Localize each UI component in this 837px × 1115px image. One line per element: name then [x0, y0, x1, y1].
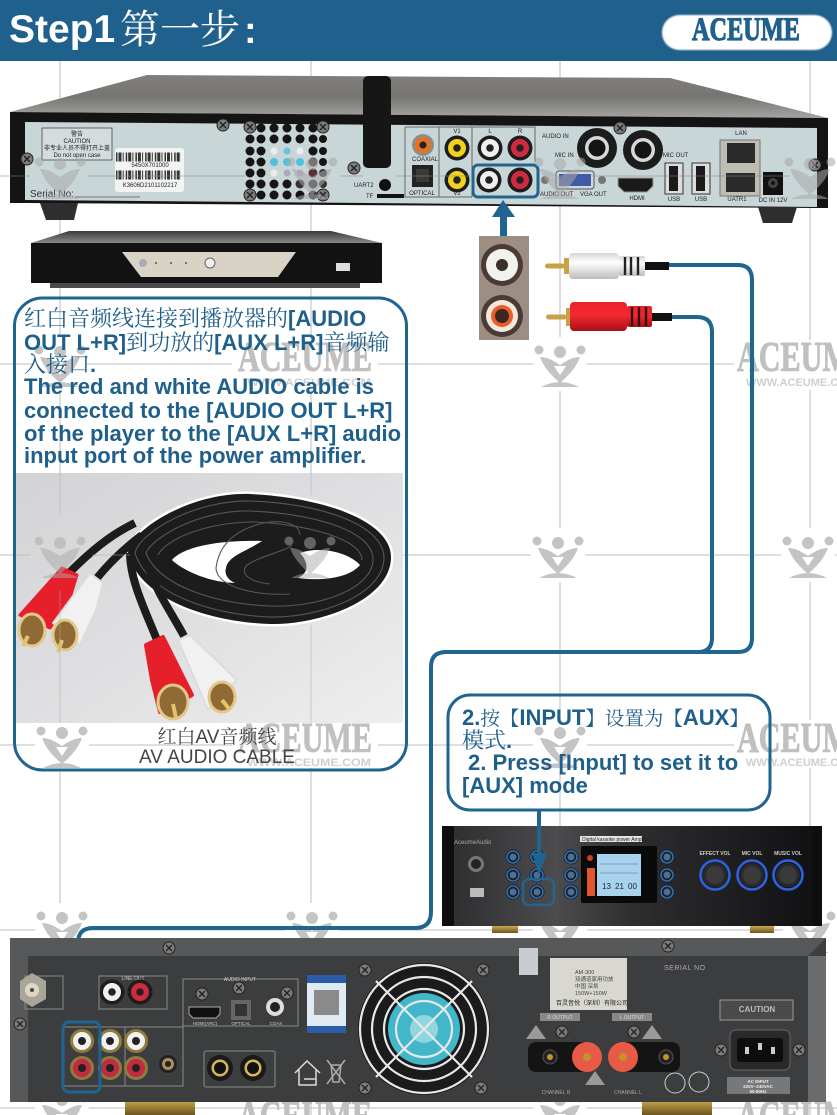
- logo: ACEUME pill: ACEUME: [692, 12, 800, 48]
- title: :: [244, 10, 257, 52]
- volume knobs: MUSIC VOL: [774, 851, 802, 857]
- caution plate: CAUTION: [739, 1005, 775, 1014]
- HDMI port: [618, 178, 653, 192]
- cooling fan: [358, 963, 490, 1095]
- callout: set input to AUX: [448, 695, 770, 810]
- connector labels: LAN: [735, 131, 747, 137]
- AC input label: AC INPUT: [747, 1079, 769, 1084]
- connector labels: COAXIAL: [412, 157, 439, 163]
- cable photo: [16, 473, 403, 723]
- watermark background grid: ACEUME: [238, 335, 372, 381]
- jack close-up photo: [479, 236, 529, 340]
- player front photo: [31, 231, 382, 288]
- amplifier front photo: [442, 826, 822, 933]
- instructions text: input port of the power amplifier.: [24, 443, 366, 468]
- barcode label: 5450X701000: [131, 163, 169, 169]
- photo caption: 红白AV音频线: [158, 726, 276, 748]
- audio input group: AUDIO INPUT: [224, 977, 256, 983]
- jack panel frames: [405, 127, 535, 197]
- DC power socket: [763, 172, 783, 195]
- text panel: connection instructions: [14, 298, 407, 770]
- antenna: [363, 76, 391, 168]
- cable coil: [128, 494, 391, 624]
- connector labels: UATR1: [727, 197, 747, 203]
- connector labels: MIC IN: [555, 153, 574, 159]
- connector labels: DC IN 12V: [759, 198, 787, 204]
- connector labels: V2: [453, 191, 461, 197]
- ventilation holes: [244, 121, 329, 201]
- power knob and USB: [468, 856, 484, 897]
- line out jacks: [99, 976, 167, 1009]
- watermark background grid: WWW.ACEUME.COM: [247, 377, 371, 389]
- watermark overlay on photo: [16, 473, 336, 723]
- caution label: [42, 128, 112, 160]
- callout text: 2. Press [Input] to set it to: [468, 750, 738, 775]
- speaker outputs: CHANNEL L: [614, 1090, 642, 1096]
- panel screws: [21, 119, 821, 174]
- serial number: Serial No:: [30, 189, 74, 200]
- LCD display: 13: [602, 882, 611, 891]
- caution plate: [720, 1000, 793, 1020]
- speaker outputs: CHANNEL R: [542, 1090, 571, 1096]
- loose cable ends: [70, 523, 184, 640]
- optical port: [412, 165, 433, 187]
- spec label and sticker: [519, 948, 628, 1010]
- connector labels: AUDIO IN: [542, 134, 569, 140]
- plugs: second pair: [146, 635, 237, 719]
- blue cable route: white channel: [78, 265, 752, 1012]
- caution label: CAUTION: [64, 139, 90, 145]
- highlight box: AUX input: [63, 1022, 100, 1092]
- connector labels: VGA OUT: [580, 192, 607, 198]
- highlight box: audio out: [473, 165, 538, 197]
- connector labels: TF: [366, 194, 374, 200]
- UART and TF ports: [377, 179, 404, 198]
- caution label: Do not open case: [53, 153, 101, 159]
- line out jacks: LINE OUT: [121, 976, 145, 982]
- volume knobs: EFFECT VOL: [699, 851, 731, 857]
- speaker outputs: [526, 1013, 709, 1096]
- LCD display: 21: [615, 882, 624, 891]
- amplifier rear photo: [10, 938, 826, 1115]
- BNC antenna connector: [20, 973, 63, 1009]
- amplifier front photo: AceumeAudio: [454, 840, 492, 846]
- header band: [0, 0, 837, 61]
- instructions text: 红白音频线连接到播放器的[AUDIO: [24, 306, 366, 331]
- house and recycling icons: [295, 1060, 345, 1085]
- spec label and sticker: 百灵音悦（深圳）有限公司: [556, 999, 628, 1007]
- connector labels: [354, 129, 787, 204]
- QR warranty label: [307, 975, 346, 1033]
- AC input label: 50-60Hz: [749, 1089, 767, 1094]
- plugs: first pair: [19, 568, 103, 652]
- connector labels: USB: [695, 197, 707, 203]
- highlight box: input button: [523, 879, 554, 905]
- spec label and sticker: AM-300: [575, 970, 594, 976]
- LCD display: 00: [628, 882, 637, 891]
- watermark background grid: ACEUME: [238, 716, 372, 762]
- instructions text: The red and white AUDIO cable is: [24, 374, 374, 399]
- audio input group: HDMI(ARC): [193, 1021, 217, 1026]
- AC input label: 220V~240VAC: [743, 1084, 774, 1089]
- instructions text: OUT L+R]到功放的[AUX L+R]音频输: [24, 330, 389, 355]
- spec label and sticker: 中国 深圳: [575, 982, 599, 990]
- callout text: 2.按【INPUT】设置为【AUX】: [462, 705, 749, 730]
- barcode label: [115, 148, 184, 192]
- photo caption: [139, 726, 295, 768]
- input and output RCA group: [63, 1027, 183, 1086]
- audio input group: OPTICAL: [231, 1021, 251, 1026]
- audio input group: COAX: [270, 1021, 282, 1026]
- title: [9, 0, 257, 55]
- barcode label: K3606D2101102217: [123, 183, 178, 189]
- red RCA plug: [546, 302, 672, 331]
- connector labels: L: [488, 129, 492, 135]
- connector labels: USB: [668, 197, 680, 203]
- power inlet: [715, 1030, 805, 1070]
- callout text: 模式.: [462, 728, 512, 753]
- connector labels: OPTICAL: [409, 191, 435, 197]
- blue cable route: red channel: [600, 317, 712, 652]
- audio in jacks: [478, 136, 532, 160]
- amplifier front photo: Digital karaoke power Amplifier: [582, 837, 651, 843]
- connector labels: UART2: [354, 183, 374, 189]
- speaker outputs: R OUTPUT: [547, 1015, 573, 1021]
- serial no text: SERIAL NO: [664, 965, 706, 972]
- instructions text: connected to the [AUDIO OUT L+R]: [24, 398, 392, 423]
- spec label and sticker: 双通道家用功放: [575, 975, 614, 983]
- LAN ports: [720, 140, 760, 196]
- LCD display: [581, 846, 657, 903]
- coaxial jack: [412, 134, 434, 156]
- audio input group: [183, 977, 298, 1026]
- photo caption: AV AUDIO CABLE: [139, 747, 295, 768]
- connector labels: V1: [453, 129, 461, 135]
- arrow to audio out: [492, 200, 515, 236]
- caution label: 警告: [71, 130, 83, 138]
- volume knobs: [699, 851, 802, 890]
- title: Step1: [9, 8, 115, 51]
- connector labels: R: [518, 129, 523, 135]
- speaker outputs: L OUTPUT: [620, 1015, 644, 1021]
- logo: ACEUME pill: [662, 12, 832, 50]
- connector labels: HDMI: [629, 196, 645, 202]
- serial number: [30, 189, 140, 200]
- arrow to input button: [532, 811, 547, 875]
- instructions text: of the player to the [AUX L+R] audio: [24, 421, 401, 446]
- watermark background grid: WWW.ACEUME.COM: [247, 757, 371, 769]
- audio out jacks: [476, 168, 532, 192]
- caution label: 非专业人员不得打开上盖: [44, 144, 110, 152]
- instructions text: 入接口.: [24, 352, 96, 377]
- volume knobs: MIC VOL: [742, 851, 762, 857]
- connector labels: AUDIO OUT: [540, 192, 574, 198]
- spec label and sticker: 150W+150W: [575, 991, 608, 997]
- watermark overlay on panel: [0, 158, 836, 199]
- video jacks: [444, 136, 470, 192]
- AC input label: [727, 1077, 790, 1094]
- connector labels: MIC OUT: [663, 153, 689, 159]
- USB ports: [665, 163, 710, 194]
- mic input jacks: [204, 1051, 275, 1087]
- white RCA plug: [545, 253, 669, 279]
- front panel buttons: [506, 850, 674, 900]
- arrow to AUX input: [71, 1008, 87, 1021]
- player rear panel photo: [0, 75, 836, 223]
- VGA port: [541, 171, 606, 189]
- mic jacks: [577, 128, 663, 170]
- callout text: [AUX] mode: [462, 773, 588, 798]
